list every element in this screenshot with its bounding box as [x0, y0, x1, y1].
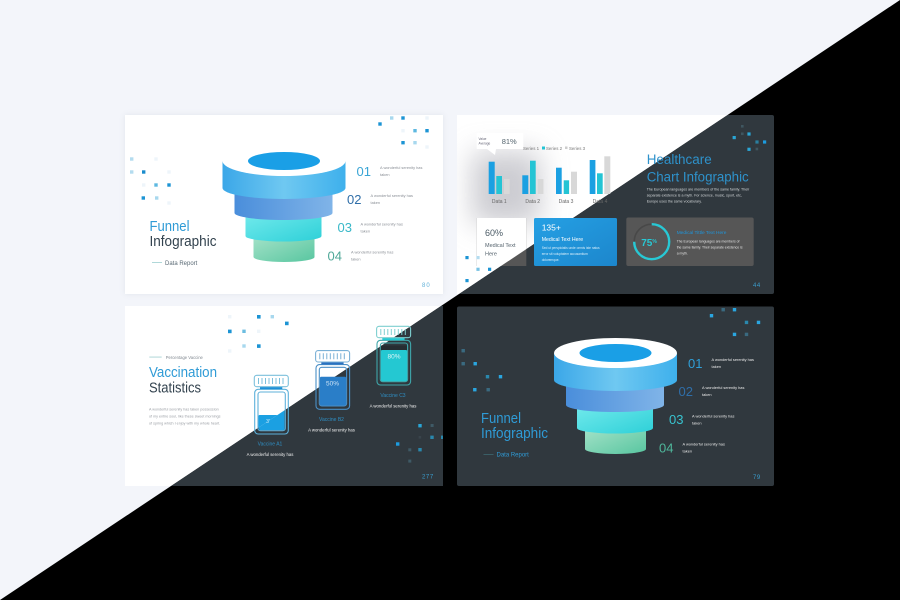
funnel light list: taken — [351, 256, 361, 262]
healthcare body text — [647, 188, 750, 204]
stat card 60% — [477, 218, 526, 266]
vaccination body text: of my entire soul, like these sweet mornings — [149, 414, 221, 418]
panel: funnel light slide — [125, 115, 443, 294]
funnel dark list: taken — [692, 420, 702, 426]
tooltip: Value — [478, 137, 487, 141]
progress ring: % — [652, 239, 657, 245]
funnel dark list: taken — [712, 364, 721, 369]
bottle: vaccine C3 — [377, 326, 411, 385]
stat card 60%: Here — [485, 252, 497, 258]
funnel light list: taken — [380, 172, 390, 177]
funnel light graphic — [222, 146, 346, 262]
funnel light list — [328, 164, 422, 264]
bar chart: Data 2 — [525, 199, 540, 205]
vaccination title — [149, 365, 217, 397]
page number: 79 — [753, 475, 761, 481]
stat card 75%: a myth. — [677, 252, 688, 256]
healthcare body text: Europe uses the same vocabulary. — [647, 200, 702, 204]
funnel light list: 01 — [356, 164, 371, 179]
funnel light dots — [130, 116, 429, 205]
bottle C3 labels: Vaccine C3 — [380, 393, 406, 399]
healthcare heading: Chart Infographic — [647, 170, 749, 184]
panel: vaccination split slide — [125, 306, 443, 486]
stat card 75% — [626, 218, 754, 266]
funnel light subtitle: Data Report — [165, 261, 198, 267]
vaccination title: Vaccination — [149, 365, 217, 381]
bottle B2 labels: A wonderful serenity has — [308, 428, 355, 432]
stat card 135+: Sed ut perspiciatis unde omnis iste natus — [542, 246, 600, 250]
bar chart: Data 1 — [492, 199, 507, 205]
healthcare body text: The European languages are members of the same family. Their — [647, 188, 750, 192]
bottle A1 labels: A wonderful serenity has — [247, 452, 293, 457]
funnel dark list: 04 — [659, 440, 673, 456]
bottle C3 labels: A wonderful serenity has — [370, 404, 416, 408]
progress ring — [634, 224, 669, 259]
stat card 75%: the same family. Their separate existence is — [677, 246, 743, 250]
funnel light list: taken — [360, 228, 370, 234]
stat card 135+: doloremque. — [542, 258, 560, 262]
funnel light list: 02 — [347, 192, 361, 207]
stat card 60%: 60% — [485, 228, 503, 238]
bottle: vaccine A1: 3' — [266, 419, 270, 425]
healthcare body text: separate existence is a myth. For science, music, sport, etc, — [647, 194, 742, 198]
funnel dark title — [481, 411, 548, 442]
funnel light title: Infographic — [150, 234, 216, 250]
page number: 44 — [753, 283, 761, 289]
healthcare heading: Healthcare — [647, 152, 712, 167]
stat card 135+: error sit voluptatem accusantium — [542, 252, 588, 256]
funnel dark list: 01 — [688, 356, 702, 371]
funnel dark list: taken — [682, 448, 692, 454]
stat card 60%: Medical Text — [485, 243, 516, 249]
tooltip — [477, 133, 523, 155]
funnel dark list: A wonderful serenity has — [692, 414, 734, 418]
funnel light list: A wonderful serenity has — [351, 250, 393, 254]
funnel light list: A wonderful serenity has — [370, 193, 413, 198]
funnel dark title: Funnel — [481, 411, 521, 427]
page number: 80 — [422, 283, 431, 289]
bottle B2 labels — [308, 417, 355, 432]
bottle C3 labels — [370, 393, 416, 408]
funnel light list: A wonderful serenity has — [380, 165, 422, 170]
funnel dark list: taken — [702, 392, 712, 397]
stat card 135+ — [534, 218, 617, 266]
tooltip: 81% — [502, 137, 517, 146]
chart legend: Series 2 — [546, 146, 563, 151]
chart legend: Series 1 — [523, 146, 540, 151]
funnel light list: taken — [370, 200, 380, 205]
funnel dark list — [659, 356, 754, 456]
funnel dark list: A wonderful serenity has — [702, 385, 744, 390]
bottle A1 labels — [247, 442, 293, 457]
funnel dark graphic — [554, 338, 677, 454]
funnel light title — [150, 219, 216, 250]
funnel dark dots — [462, 308, 760, 391]
chart legend: Series 3 — [569, 146, 586, 151]
stat card 75%: Medical Tittle Text Here — [677, 230, 727, 236]
vaccination body text: A wonderful serenity has taken possession — [149, 408, 219, 412]
funnel dark title: Infographic — [481, 426, 548, 442]
funnel dark list: A wonderful serenity has — [682, 442, 725, 446]
funnel light list: 04 — [328, 248, 342, 264]
funnel dark list: A wonderful serenity has — [712, 357, 754, 362]
stat card 75%: The European languages are members of — [677, 240, 740, 244]
bottle: vaccine B2 — [316, 351, 350, 409]
bottle: vaccine A1 — [254, 375, 288, 434]
funnel dark list: 02 — [678, 384, 693, 399]
vaccination kicker — [149, 355, 204, 360]
funnel dark subtitle: Data Report — [496, 452, 529, 458]
panel: healthcare chart split slide — [457, 115, 774, 294]
bottle: vaccine B2: 50% — [326, 380, 339, 388]
vaccination body text: of spring which I enjoy with my whole heart. — [149, 422, 220, 426]
bottle: vaccine C3: 80% — [387, 354, 401, 360]
panel: funnel dark slide — [457, 306, 774, 486]
vaccination title: Statistics — [149, 381, 201, 397]
bar chart: Data 4 — [593, 199, 608, 205]
funnel dark list: 03 — [669, 412, 683, 427]
tooltip: Average — [478, 141, 491, 145]
vaccination body text — [149, 408, 221, 426]
healthcare dots — [465, 125, 766, 282]
card background split — [125, 306, 443, 486]
bar chart: Data 3 — [559, 199, 574, 205]
bar chart — [489, 156, 610, 205]
stat card 135+: Medical Text Here — [542, 237, 583, 243]
stat card 135+: 135+ — [542, 222, 561, 232]
bottle A1 labels: Vaccine A1 — [258, 442, 283, 448]
funnel light title: Funnel — [150, 219, 190, 235]
vaccination kicker: Percentage Vaccine — [166, 355, 204, 360]
progress ring: 75 — [641, 238, 652, 249]
bottle B2 labels: Vaccine B2 — [319, 417, 344, 423]
funnel light list: 03 — [338, 220, 352, 235]
card background split — [457, 115, 774, 294]
page number: 277 — [422, 474, 434, 480]
chart legend — [519, 146, 586, 151]
vaccination dots — [228, 315, 443, 463]
healthcare heading — [647, 152, 749, 184]
funnel light list: A wonderful serenity has — [360, 222, 403, 226]
